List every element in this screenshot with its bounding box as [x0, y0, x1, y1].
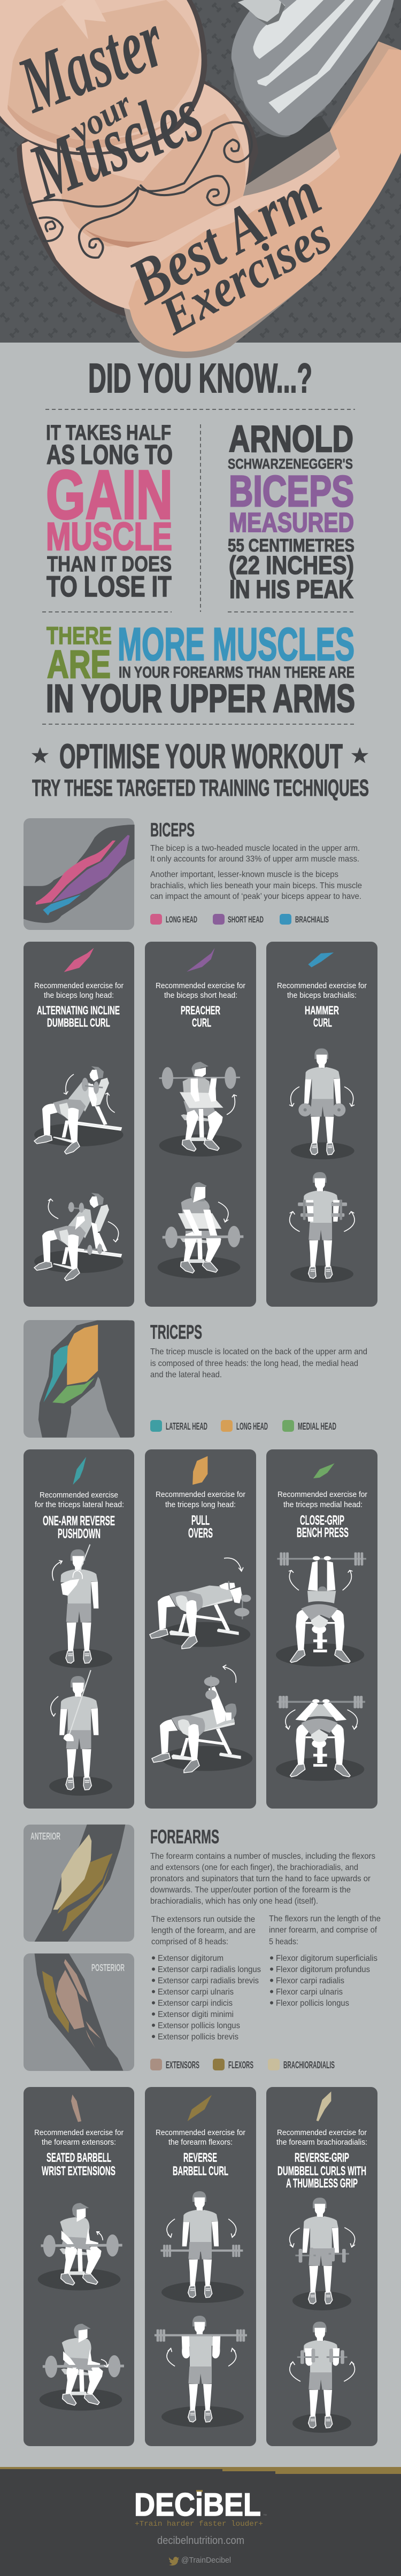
card: alternating incline dumbbell curl: Recommended exercise for [34, 981, 124, 990]
text: biceps description: can impact the amount of ‘peak’ your biceps appear to have. [150, 892, 361, 901]
text: forearms description: The forearm contains a number of muscles, including the flexors [150, 1852, 375, 1861]
card: close-grip bench press: the triceps medial head: [283, 1500, 363, 1509]
tattoo flourishes [29, 122, 252, 258]
figure: preacher up [159, 1062, 242, 1157]
card: reverse-grip dumbbell curls: the forearm brachioradialis: [276, 2138, 367, 2147]
brachioradialis [53, 1834, 91, 1910]
medial head [52, 1378, 95, 1403]
figure: reverse curl up [155, 2316, 247, 2427]
card: seated barbell wrist extensions: Recommended exercise for [34, 2128, 124, 2137]
card: hammer curl: Recommended exercise for [277, 981, 367, 990]
card: one-arm reverse pushdown [24, 1449, 134, 1809]
figure: press down [276, 1696, 365, 1781]
card: close-grip bench press: Recommended exercise for [277, 1490, 367, 1499]
fact: more muscles in forearms: THERE [47, 622, 112, 649]
fact: gain muscle: MUSCLE [46, 515, 172, 558]
legend: forearms: FLEXORS [228, 2060, 253, 2070]
panel: forearm posterior diagram: POSTERIOR [91, 1962, 125, 1973]
text: extensors list: Extensor digitorum [158, 1954, 223, 1963]
text: flexors list: Flexor pollicis longus [276, 1999, 349, 2008]
card: reverse barbell curl: BARBELL CURL [173, 2164, 228, 2178]
card: one-arm reverse pushdown: Recommended exercise [40, 1491, 118, 1500]
logo: Decibel: DECiBEL [134, 2487, 261, 2523]
text: flexors list: 5 heads: [269, 1937, 298, 1946]
card: preacher curl: Recommended exercise for [156, 981, 245, 990]
card: alternating incline dumbbell curl: the biceps long head: [44, 991, 114, 1000]
fact: arnold biceps: BICEPS [229, 467, 354, 516]
card: alternating incline dumbbell curl: ALTERNATING INCLINE [37, 1004, 120, 1017]
text: triceps description [150, 1321, 367, 1379]
card: reverse barbell curl: the forearm flexors: [168, 2138, 233, 2147]
fact: more muscles in forearms: ARE [47, 643, 111, 686]
text: forearms description: and extensors (one for each finger), the brachioradialis, and [150, 1863, 358, 1872]
fact: gain muscle [46, 421, 173, 603]
card: pull overs: Recommended exercise for [156, 1490, 245, 1499]
figure: hammer down [289, 1049, 354, 1159]
heading: optimise your workout [32, 737, 369, 801]
arm outline shadow [17, 81, 258, 327]
text: forearms description [150, 1826, 375, 1906]
card: one-arm reverse pushdown: PUSHDOWN [58, 1526, 101, 1541]
fact: gain muscle: AS LONG TO [47, 439, 173, 470]
dumbbell [232, 0, 394, 137]
figure: wrist extension up [38, 2203, 122, 2291]
flexor [42, 1971, 69, 2033]
panel: biceps diagram [24, 818, 135, 930]
card: pull overs [145, 1449, 256, 1809]
text: extensors list: length of the forearm, and are [151, 1926, 256, 1935]
subtitle: Best Arm Exercises: Exercises [150, 205, 341, 346]
card: reverse-grip dumbbell curls: REVERSE-GRIP [295, 2151, 349, 2165]
forearm [110, 42, 401, 358]
long head [67, 1325, 98, 1385]
figure: hammer up [290, 1172, 354, 1283]
text: extensors list: comprised of 8 heads: [151, 1937, 228, 1946]
legend: biceps: SHORT HEAD [228, 914, 264, 925]
fact: gain muscle: TO LOSE IT [47, 570, 172, 603]
text: biceps description: Another important, lesser-known muscle is the biceps [150, 870, 338, 879]
figure: pull over down [150, 1558, 251, 1649]
card: one-arm reverse pushdown: for the triceps lateral head: [35, 1500, 124, 1509]
card: preacher curl: CURL [192, 1016, 211, 1029]
text: biceps description: It only accounts for around 33% of upper arm muscle mass. [150, 855, 359, 864]
icon: extensors [71, 2094, 81, 2122]
icon: brachialis [308, 952, 334, 967]
card: hammer curl: the biceps brachialis: [287, 991, 357, 1000]
card: alternating incline dumbbell curl: DUMBBELL CURL [47, 1016, 110, 1029]
text: forearms description: downwards. The upper/outer portion of the forearm is the [150, 1886, 351, 1895]
fact: arnold biceps: ARNOLD [229, 418, 353, 460]
text: extensors list: Extensor carpi ulnaris [158, 1988, 234, 1997]
text: flexors list: Flexor carpi radialis [276, 1976, 344, 1985]
card: preacher curl: PREACHER [181, 1004, 220, 1017]
fact: more muscles in forearms [46, 619, 355, 720]
text: flexors list: Flexor carpi ulnaris [276, 1988, 343, 1997]
fact: gain muscle: THAN IT DOES [47, 552, 172, 576]
legend: biceps: BRACHIALIS [295, 914, 329, 925]
figure: dumbbell curl down [290, 2198, 355, 2310]
long head [36, 841, 115, 905]
icon: lateral head [73, 1457, 86, 1485]
text: forearms description: brachioradialis, which has only one head (itself). [150, 1897, 318, 1906]
card: close-grip bench press: BENCH PRESS [297, 1525, 349, 1540]
card: hammer curl: HAMMER [305, 1004, 339, 1017]
fact: arnold biceps: MEASURED [229, 507, 354, 538]
tagline: +Train harder faster louder+ [135, 2520, 263, 2528]
card: reverse barbell curl: Recommended exercise for [156, 2128, 245, 2137]
figure: press up [276, 1553, 366, 1666]
subtitle: Best Arm Exercises: Best Arm [117, 157, 331, 318]
text: extensors list [151, 1915, 261, 2042]
text: extensors list: Extensor carpi indicis [158, 1999, 233, 2008]
panel: forearm anterior diagram [24, 1825, 134, 1942]
fact: gain muscle: GAIN [46, 456, 173, 533]
icon: long head [192, 1456, 207, 1485]
figure: wrist extension down [40, 2324, 124, 2411]
text: biceps description [150, 819, 362, 901]
website: decibelnutrition.com [157, 2535, 244, 2547]
fact: arnold biceps: IN HIS PEAK [229, 576, 353, 604]
short head [52, 835, 129, 903]
subtitle: Best Arm Exercises [117, 157, 341, 346]
icon: brachioradialis [317, 2091, 331, 2121]
fact: arnold biceps: (22 INCHES) [229, 552, 354, 580]
logo: Decibel: ™ [263, 2514, 267, 2518]
legend: forearms: BRACHIORADIALIS [283, 2060, 335, 2070]
card: reverse barbell curl [145, 2087, 256, 2446]
text: extensors list: Extensor carpi radialis brevis [158, 1976, 259, 1985]
text: extensors list: Extensor carpi radialis longus [158, 1965, 261, 1974]
card: seated barbell wrist extensions [24, 2087, 134, 2446]
legend: forearms [150, 2059, 335, 2070]
card: alternating incline dumbbell curl [24, 942, 134, 1307]
fact: gain muscle: IT TAKES HALF [46, 421, 171, 445]
text: biceps description: BICEPS [150, 819, 195, 841]
text: forearms description: pronators and supinators that turn the hand to face upwards or [150, 1874, 371, 1883]
card: pull overs: the triceps long head: [165, 1500, 236, 1509]
biceps [22, 83, 249, 310]
lateral head [43, 1345, 68, 1402]
text: flexors list: Flexor digitorum superficialis [276, 1954, 377, 1963]
icon: long head [64, 948, 94, 972]
dumbbell backing shadow [242, 115, 336, 196]
twitter handle: @TrainDecibel [181, 2556, 231, 2565]
icon: twitter bird [169, 2557, 179, 2565]
figure: dumbbell curl up [290, 2322, 355, 2433]
fact: arnold biceps: 55 CENTIMETRES [228, 536, 354, 556]
text: triceps description: is composed of three heads: the long head, the medial head [150, 1359, 358, 1368]
panel: forearm posterior diagram [24, 1953, 134, 2071]
shoulder [0, 0, 207, 155]
title: Master your Muscles [7, 0, 214, 217]
text: biceps description: The bicep is a two-headed muscle located in the upper arm. [150, 844, 360, 853]
title: Master your Muscles: Muscles [18, 69, 214, 217]
icon: stars [32, 747, 368, 763]
figure: pull over up [152, 1665, 252, 1773]
panel: triceps diagram [24, 1320, 135, 1438]
card: reverse-grip dumbbell curls [266, 2087, 377, 2446]
text: extensors list: Extensor pollicis brevis [158, 2032, 238, 2042]
text: extensors list: Extensor pollicis longus [158, 2021, 240, 2030]
figure: curl down [34, 1193, 124, 1281]
card: pull overs: PULL [191, 1513, 210, 1528]
figure: curl up [34, 1066, 124, 1154]
card: pull overs: OVERS [188, 1526, 213, 1541]
title: Master your Muscles: your [60, 83, 139, 152]
icon: short head [187, 948, 215, 972]
legend: forearms: EXTENSORS [166, 2060, 199, 2070]
card: seated barbell wrist extensions: the forearm extensors: [42, 2138, 116, 2147]
legend: biceps [150, 914, 329, 925]
text: triceps description: and the lateral head. [150, 1370, 222, 1379]
footer [0, 2467, 401, 2576]
legend: biceps: LONG HEAD [166, 914, 197, 925]
card: reverse-grip dumbbell curls: Recommended exercise for [277, 2128, 367, 2137]
panel: forearm anterior diagram: ANTERIOR [30, 1831, 60, 1842]
card: seated barbell wrist extensions: WRIST EXTENSIONS [42, 2164, 115, 2178]
card: seated barbell wrist extensions: SEATED BARBELL [47, 2151, 111, 2165]
flexors [58, 1853, 112, 1914]
text: triceps description: TRICEPS [150, 1321, 202, 1343]
fact: arnold biceps: SCHWARZENEGGER'S [228, 456, 353, 472]
text: extensors list: Extensor digiti minimi [158, 2010, 234, 2019]
figure: pushdown up [49, 1545, 112, 1668]
text: biceps description: brachialis, which lies beneath your main biceps. This muscle [150, 881, 362, 890]
text: extensors list: The extensors run outside the [151, 1915, 255, 1924]
card: close-grip bench press [266, 1449, 377, 1809]
fact: arnold biceps [228, 418, 354, 604]
figure: reverse curl down [160, 2191, 244, 2303]
figure: preacher down [158, 1182, 243, 1278]
hero: flexed arm illustration [0, 0, 401, 358]
card: reverse barbell curl: REVERSE [183, 2151, 217, 2165]
legend: triceps: MEDIAL HEAD [298, 1421, 336, 1432]
legend: triceps: LATERAL HEAD [166, 1421, 207, 1432]
card: hammer curl [266, 942, 377, 1307]
legend: triceps: LONG HEAD [236, 1421, 268, 1432]
icon: medial head [313, 1463, 335, 1478]
legend: triceps [150, 1420, 336, 1432]
icon: flexors [188, 2095, 212, 2121]
card: preacher curl: the biceps short head: [164, 991, 237, 1000]
text: triceps description: The tricep muscle is located on the back of the upper arm and [150, 1347, 367, 1356]
dashed dividers [42, 409, 355, 724]
card: preacher curl [145, 942, 256, 1307]
text: flexors list [269, 1914, 381, 2008]
arrows [48, 1199, 119, 1242]
extensors [56, 1970, 84, 2029]
card: close-grip bench press: CLOSE-GRIP [300, 1513, 344, 1528]
text: forearms description: FOREARMS [150, 1826, 219, 1848]
brachialis [43, 895, 81, 915]
card: one-arm reverse pushdown: ONE-ARM REVERSE [43, 1514, 115, 1528]
text: flexors list: Flexor digitorum profundus [276, 1965, 370, 1974]
card: hammer curl: CURL [313, 1016, 332, 1029]
text: flexors list: inner forearm, and comprise of [269, 1926, 377, 1935]
figure: pushdown down [49, 1670, 112, 1796]
text: flexors list: The flexors run the length of the [269, 1914, 381, 1923]
